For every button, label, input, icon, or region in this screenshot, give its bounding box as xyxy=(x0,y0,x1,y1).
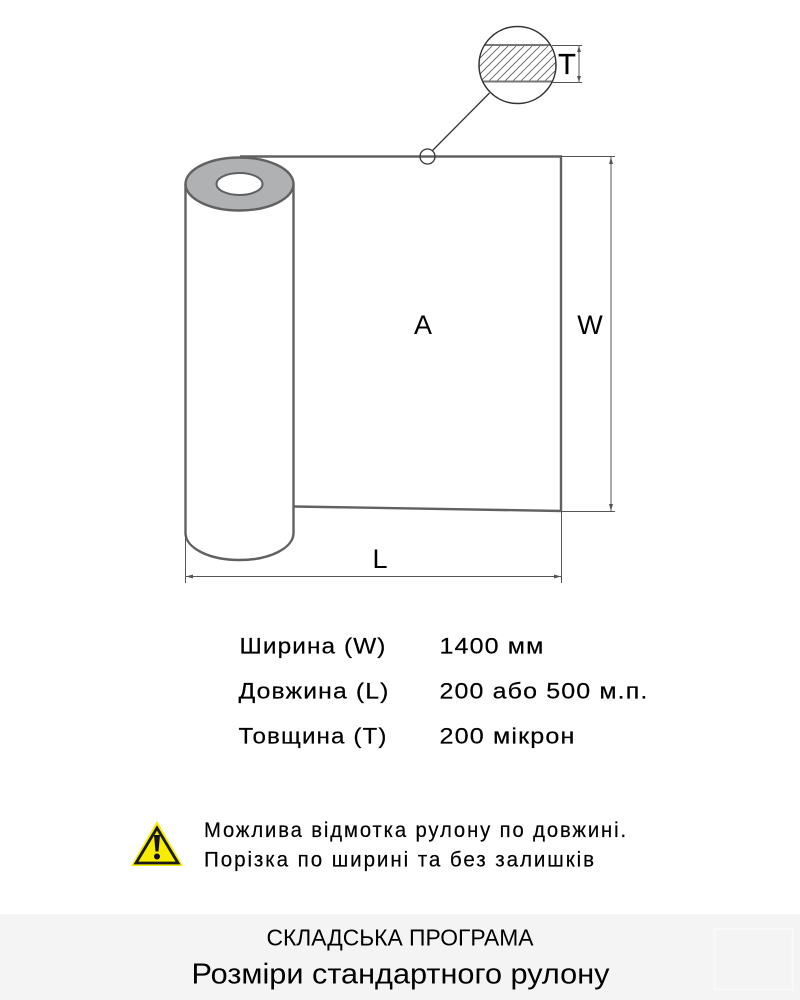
label W: W xyxy=(577,310,603,340)
specifications table xyxy=(238,634,648,748)
note text: Можлива відмотка рулону по довжині. xyxy=(204,818,628,842)
footer band xyxy=(0,914,800,1000)
spec: thickness: 200 мікрон xyxy=(440,724,576,748)
spec: thickness xyxy=(238,724,576,748)
spec: length xyxy=(238,678,648,704)
roll top face xyxy=(186,158,294,210)
thickness dimension T xyxy=(552,46,582,82)
pointer circle and leader line xyxy=(420,93,490,164)
spec: length: 200 або 500 м.п. xyxy=(440,678,648,704)
width dimension W xyxy=(561,156,615,512)
spec: width xyxy=(240,634,544,658)
label T: T xyxy=(558,49,576,81)
footer heading: СКЛАДСЬКА ПРОГРАМА xyxy=(266,924,534,950)
note text: Порізка по ширині та без залишків xyxy=(204,848,596,872)
diagram: film roll with dimensions xyxy=(186,26,615,583)
magnified cross-section xyxy=(478,26,557,104)
spec: length: Довжина (L) xyxy=(238,678,390,704)
length dimension L xyxy=(186,511,562,583)
footer title: Розміри стандартного рулону xyxy=(192,958,610,990)
spec: width: Ширина (W) xyxy=(240,634,386,658)
note text xyxy=(204,818,628,872)
sheet outline xyxy=(240,156,561,511)
icon: warning triangle xyxy=(131,821,183,866)
spec: width: 1400 мм xyxy=(440,634,544,658)
roll cylinder xyxy=(186,184,294,560)
label A: A xyxy=(414,310,432,340)
label L: L xyxy=(372,544,388,574)
spec: thickness: Товщина (T) xyxy=(238,724,388,748)
